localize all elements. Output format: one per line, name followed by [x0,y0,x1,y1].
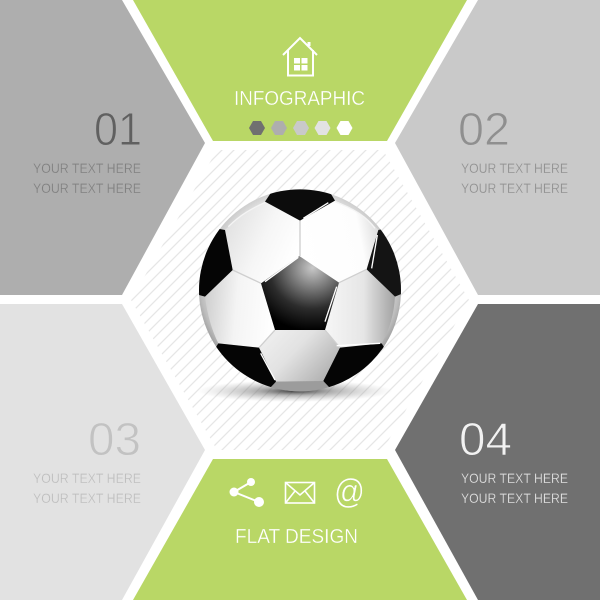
patch: upper right white [299,201,378,283]
text lines 03: YOUR TEXT HERE [33,470,141,486]
icon: at sign: @ [334,473,365,511]
hexagon dots [249,121,352,135]
icon: envelope [286,482,314,503]
text lines 04: YOUR TEXT HERE [461,470,568,486]
number 04: 04 [459,413,512,465]
text lines 02: YOUR TEXT HERE [461,180,568,196]
text lines 02 [461,160,568,196]
panel 04 [395,304,600,600]
seams [228,202,380,380]
patch: right black [366,230,401,297]
patch: centre pentagon [261,256,339,330]
patch: upper left white [225,202,300,283]
center striped hexagon [131,150,469,450]
text lines 04: YOUR TEXT HERE [461,490,568,506]
number 03: 03 [88,413,141,465]
panel: top green [133,0,467,141]
text lines 03: YOUR TEXT HERE [33,490,141,506]
panel: bottom green [133,459,467,600]
patch: lower left white [205,270,275,348]
number 01: 01 [94,103,142,155]
panel 03 [0,304,205,600]
ball shadow [197,380,393,402]
text lines 02: YOUR TEXT HERE [461,160,568,176]
icon: share [230,478,264,507]
text lines 03 [33,470,141,506]
patch: lower right white [325,269,395,348]
patch: left black [199,229,233,297]
panel 02 [395,0,600,295]
text lines 04 [461,470,568,506]
patch: bottom right black [323,343,384,387]
text lines 01 [33,160,141,196]
panel 01 [0,0,205,295]
number 02: 02 [458,103,510,155]
heading: INFOGRAPHIC: INFOGRAPHIC [234,88,365,110]
soccer ball [199,189,401,392]
patch: bottom left black [216,343,276,387]
heading: FLAT DESIGN: FLAT DESIGN [235,526,358,548]
icon: house [283,38,317,76]
patch: bottom panel [259,330,340,382]
text lines 01: YOUR TEXT HERE [33,180,141,196]
text lines 01: YOUR TEXT HERE [33,160,141,176]
patch: top black [265,189,335,220]
